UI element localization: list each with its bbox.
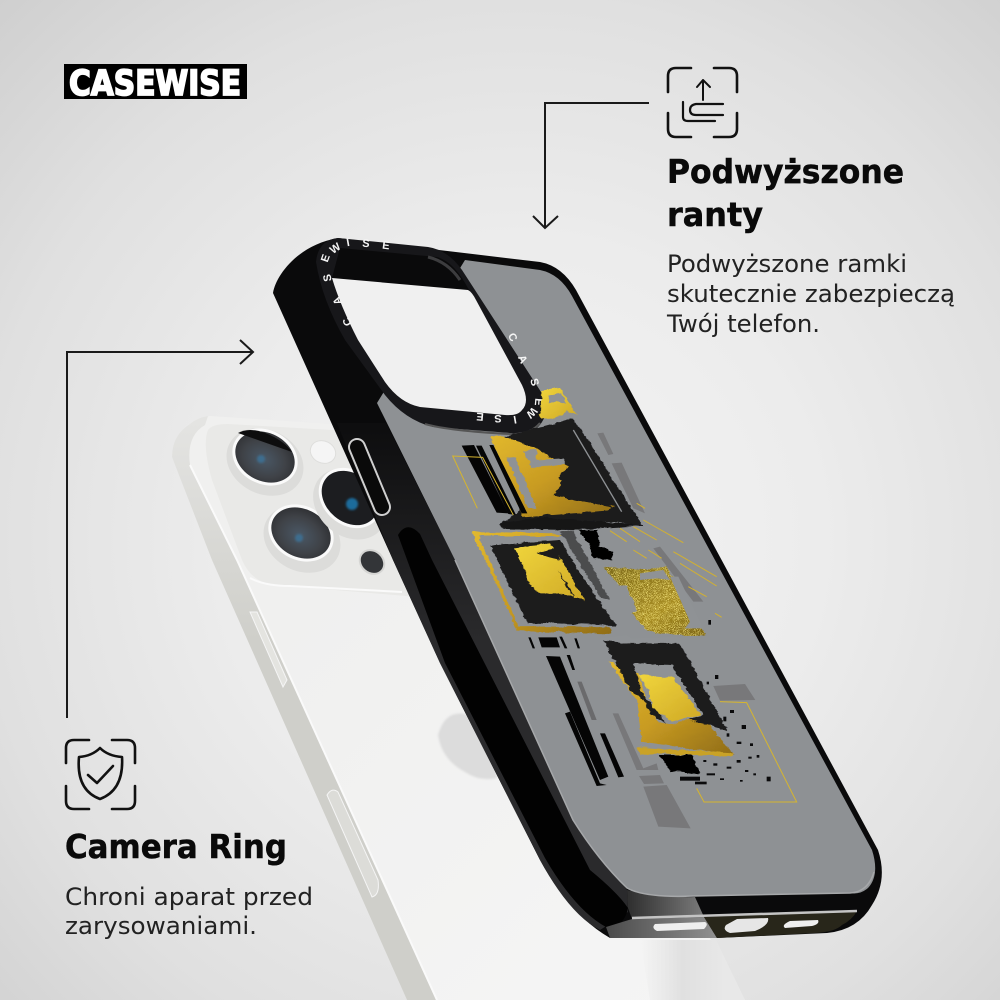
- black strokes lower left: [528, 637, 624, 786]
- bottom grey lower: [606, 917, 717, 938]
- abstract gold artwork: [453, 387, 797, 828]
- text: camera ring description: Chroni aparat przed: [65, 883, 313, 911]
- side button lower: [327, 790, 378, 897]
- phone side band: [172, 416, 437, 1000]
- ring lettering: W: [328, 241, 344, 257]
- block 2: [472, 532, 617, 634]
- gray overlay on glitter: [640, 570, 703, 628]
- side slot: [398, 527, 628, 927]
- lens 3: [299, 454, 401, 554]
- text: camera ring description: zarysowaniami.: [65, 912, 257, 940]
- camera ring: [316, 237, 546, 434]
- gray back panel: [377, 260, 875, 896]
- phone back: [172, 416, 745, 1000]
- text: raised edges description: Twój telefon.: [666, 310, 820, 338]
- black speckles: [680, 620, 771, 784]
- ring lettering: E: [476, 410, 484, 422]
- lens 1: [215, 415, 315, 509]
- heading: Camera Ring: Camera Ring: [65, 827, 287, 866]
- arrow: to camera ring: [67, 340, 253, 718]
- icon: raised edges: [668, 68, 737, 137]
- arrow: to raised edges: [533, 103, 649, 228]
- ring lettering: A: [331, 295, 345, 307]
- ring lettering: [319, 237, 544, 425]
- block 4: [603, 640, 734, 773]
- ring lettering: C: [505, 331, 519, 344]
- text: camera ring description: [65, 883, 313, 940]
- text: raised edges description: Podwyższone ramki: [667, 250, 907, 278]
- port cutouts: [653, 918, 818, 933]
- ring lettering: S: [321, 273, 335, 282]
- heading: Podwyższone ranty: Podwyższone: [667, 152, 904, 191]
- side band: [337, 423, 628, 930]
- text: raised edges description: [666, 250, 955, 338]
- ring lettering: S: [527, 377, 541, 387]
- gray strokes: [597, 433, 755, 828]
- camera plateau: [206, 424, 420, 597]
- ring lettering: W: [523, 404, 539, 421]
- ring lettering: S: [494, 412, 502, 424]
- icon: shield check: [66, 740, 135, 809]
- apple logo: [438, 713, 497, 779]
- microphone sensor: [355, 545, 389, 579]
- flash: [307, 437, 339, 467]
- ring lettering: E: [319, 253, 333, 264]
- heading: Podwyższone ranty: [667, 152, 904, 234]
- thin gold frame: [697, 702, 797, 802]
- ring lettering: E: [532, 398, 544, 406]
- side button upper: [250, 612, 287, 687]
- ring lettering: I: [512, 413, 517, 425]
- case body: [273, 238, 882, 938]
- heading: Podwyższone ranty: ranty: [667, 195, 763, 234]
- text: raised edges description: skutecznie zabezpieczą: [667, 280, 955, 308]
- white phone: [172, 415, 745, 1000]
- bottom olive strip: [704, 911, 857, 938]
- lens 2: [252, 492, 352, 586]
- logo: CASEWISE: CASEWISE: [69, 64, 241, 104]
- block 1: [490, 387, 643, 560]
- gray swoosh: [600, 635, 682, 645]
- panel and edge highlights: [455, 560, 874, 896]
- phone case: [273, 238, 882, 938]
- block 3 glitter: [603, 567, 707, 636]
- ring lettering: C: [341, 315, 355, 328]
- ring lettering: I: [346, 237, 351, 249]
- stripes and line of block 1: [453, 430, 622, 515]
- soft shade near bottom: [640, 940, 745, 1000]
- bottom grey upper: [627, 890, 704, 919]
- volume button: [357, 447, 382, 507]
- ring lettering: A: [515, 353, 529, 366]
- ring lettering: E: [382, 240, 390, 252]
- ring lettering: S: [362, 238, 370, 250]
- gold rays: [610, 503, 722, 617]
